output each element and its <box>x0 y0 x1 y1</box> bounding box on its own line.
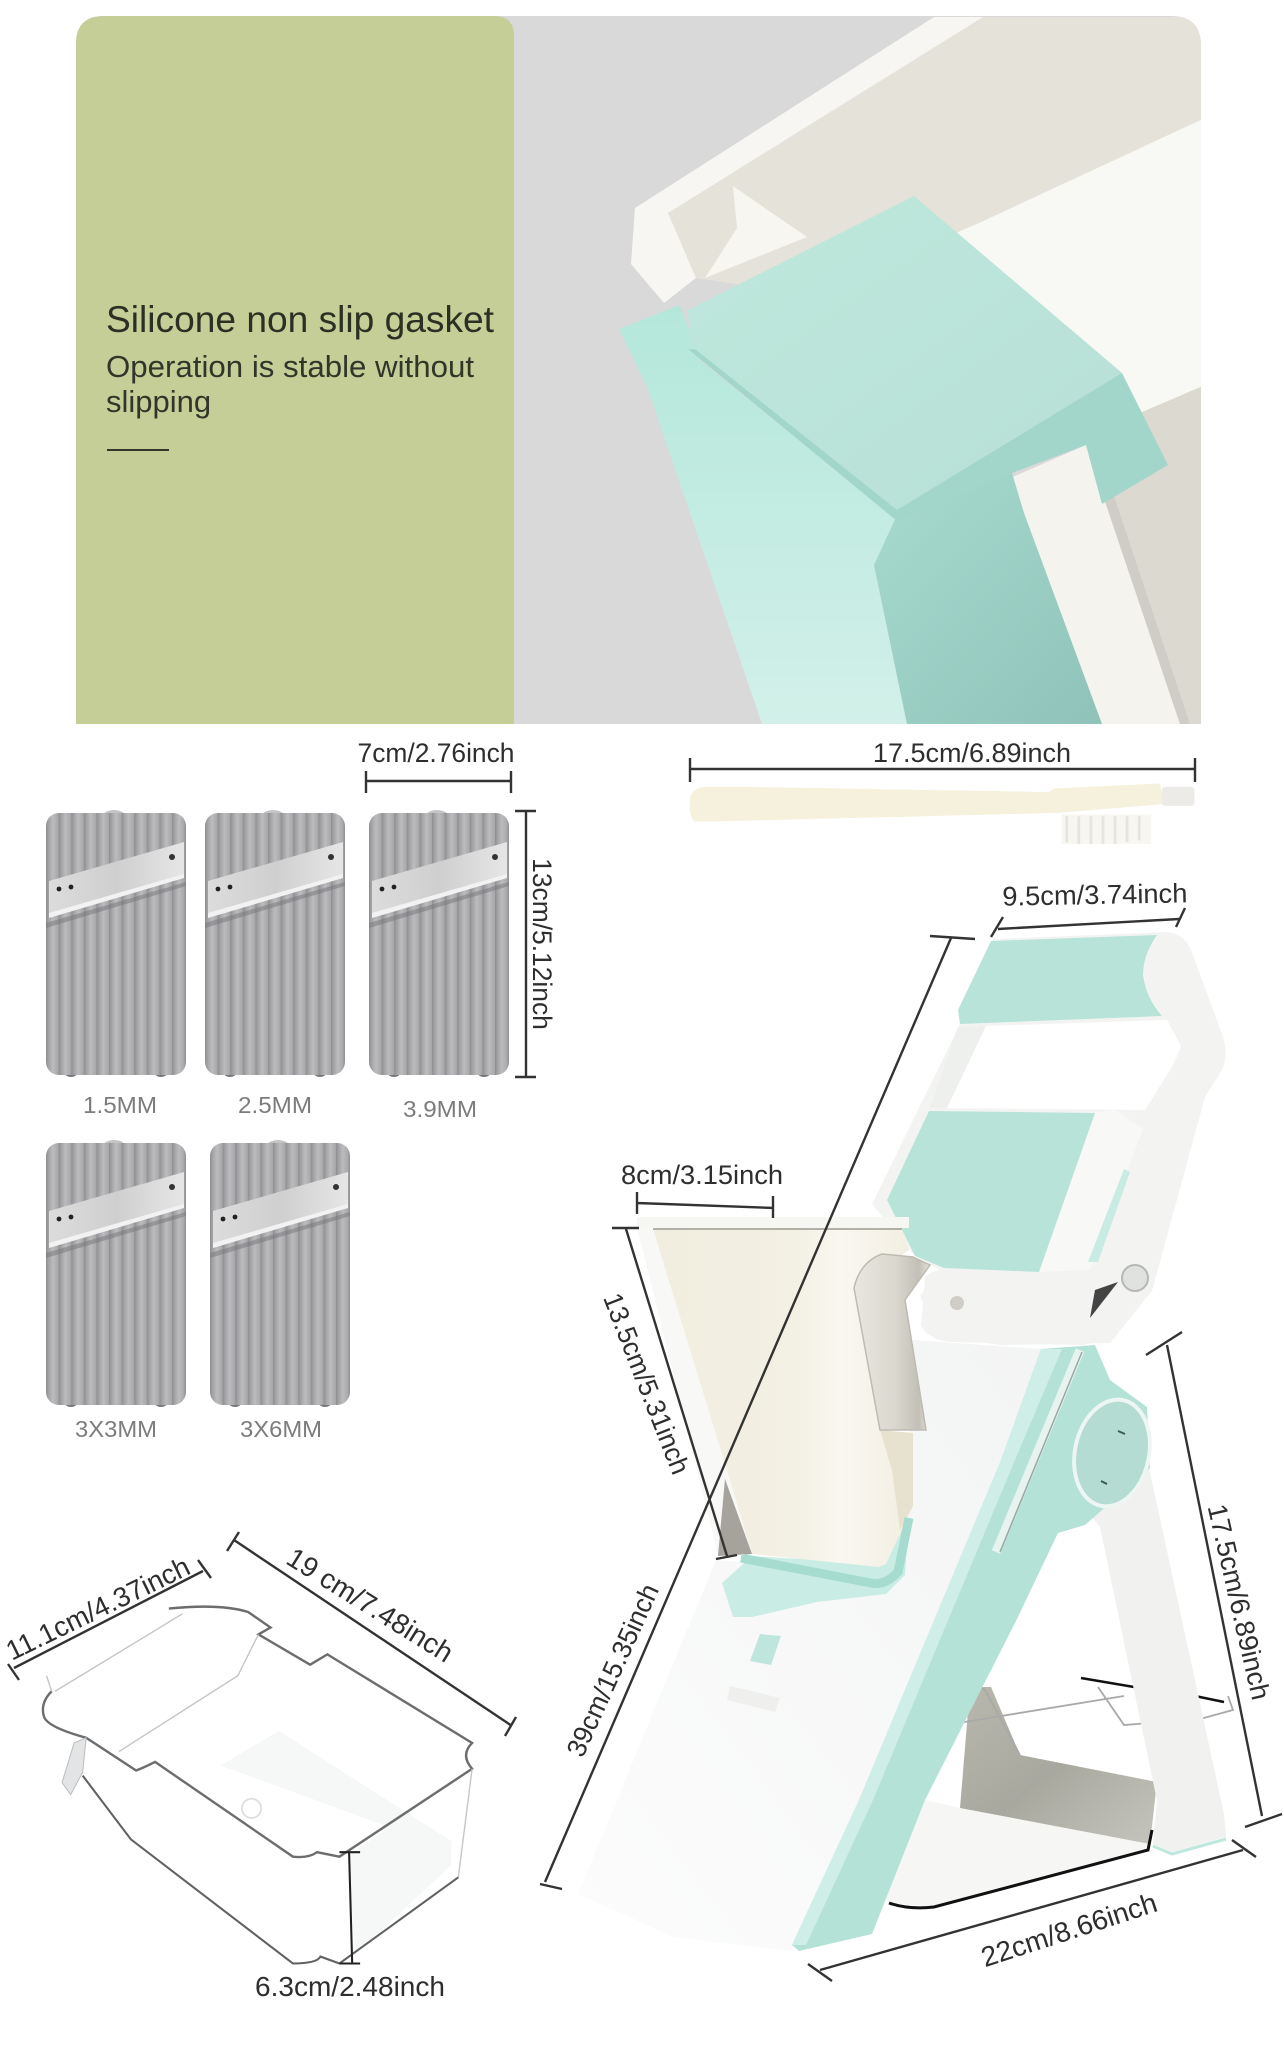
metal blade housing <box>960 1687 1157 1844</box>
dimension: handle width 9.5cm <box>991 878 1188 937</box>
blade 3x3mm <box>46 1140 186 1442</box>
slot groove <box>1000 1352 1082 1552</box>
stripe slot <box>996 1350 1080 1552</box>
slider switch mint <box>750 1634 781 1665</box>
tray outline <box>43 1607 472 1857</box>
gasket pad side <box>688 349 1168 521</box>
blade 2.5mm: 2.5MM <box>238 1092 312 1118</box>
dimension: overall height 39cm: 39cm/15.35inch <box>561 1579 665 1761</box>
dimension: rear leg height 17.5cm <box>1146 1332 1282 1827</box>
blade 2.5mm <box>205 810 345 1118</box>
gasket leg darker side <box>874 473 1102 724</box>
dimension: overall height 39cm <box>540 936 975 1889</box>
gasket leg front face <box>619 305 907 724</box>
tray white inner ledge <box>957 120 1201 412</box>
blade 1.5mm: 1.5MM <box>83 1092 157 1118</box>
hopper seal pale area <box>722 1518 909 1617</box>
hinge disc marks <box>1101 1431 1125 1484</box>
icon: cleaning brush <box>690 783 1194 844</box>
handle frame <box>872 932 1226 1345</box>
black shadow line <box>889 1830 1152 1908</box>
slider switch lower tab <box>727 1686 780 1712</box>
pivot arm hole <box>950 1296 964 1310</box>
rear leg <box>1072 1463 1226 1852</box>
dimension: tray length 19cm: 19 cm/7.48inch <box>281 1541 459 1668</box>
blade 1.5mm <box>46 810 186 1118</box>
hopper cream body <box>653 1229 913 1567</box>
tray height dimension line <box>339 1852 360 1963</box>
dimension: hopper width 8cm: 8cm/3.15inch <box>621 1160 783 1190</box>
blade 3.9mm: 3.9MM <box>403 1096 477 1122</box>
green caption panel <box>76 16 514 724</box>
white strap <box>1008 445 1180 724</box>
pusher mint plate <box>887 1111 1095 1272</box>
handle left strut shade <box>930 1026 986 1108</box>
dimension: hopper height 13.5cm: 13.5cm/5.31inch <box>597 1289 696 1479</box>
short rule under description <box>107 449 169 451</box>
dimension: brush length 17.5cm <box>690 738 1195 782</box>
dimension: tray length 19cm <box>227 1532 516 1736</box>
pivot dark metal <box>1090 1282 1118 1318</box>
hinge disc <box>1065 1392 1159 1514</box>
dimension: rear leg height 17.5cm: 17.5cm/6.89inch <box>1202 1501 1276 1703</box>
illustration: mandoline slicer <box>578 932 1233 1951</box>
tray floor shading <box>221 1731 451 1955</box>
main front body <box>578 1340 1041 1951</box>
rear foot accent <box>1153 1839 1226 1854</box>
stripe lighter edge <box>792 1349 1062 1945</box>
panel: silicone non slip gasket <box>76 16 1205 724</box>
heading: silicone non slip gasket: Silicone non slip gasket <box>106 299 495 340</box>
dimension: blade width 7cm: 7cm/2.76inch <box>358 738 514 768</box>
pivot joint <box>1122 1265 1148 1291</box>
mint side stripe <box>792 1345 1150 1951</box>
dimension: tray width 11.1cm: 11.1cm/4.37inch <box>1 1551 195 1666</box>
small clip detail <box>705 186 807 278</box>
hopper rim <box>637 1217 909 1228</box>
handle mint grip <box>958 935 1162 1024</box>
blade 3x6mm <box>210 1140 350 1442</box>
tray bottom edge <box>83 1776 458 1963</box>
dimension: blade height 13cm: 13cm/5.12inch <box>527 858 557 1030</box>
gasket pad top <box>688 196 1122 510</box>
dimension: hopper width 8cm <box>621 1160 783 1218</box>
tray faint inner edges <box>47 1614 472 1877</box>
pusher side strip <box>1039 1109 1143 1272</box>
pivot arm <box>921 1259 1150 1345</box>
blade 3x6mm: 3X6MM <box>240 1416 322 1442</box>
dimension: brush length 17.5cm: 17.5cm/6.89inch <box>873 738 1071 768</box>
hidden dimension fragments <box>1081 1678 1224 1702</box>
dimension: base depth 22cm <box>808 1840 1256 1981</box>
dimension: handle width 9.5cm: 9.5cm/3.74inch <box>1002 878 1188 912</box>
description text: Operation is stable without <box>106 349 474 384</box>
blade 3.9mm <box>369 810 509 1122</box>
illustration: catch tray <box>43 1607 472 1963</box>
transparent tray behind legs <box>958 1680 1233 1755</box>
photo: gasket close-up <box>76 16 1205 724</box>
blade 3x3mm: 3X3MM <box>75 1416 157 1442</box>
hopper rim line <box>653 1228 902 1230</box>
tray side tab <box>62 1738 86 1795</box>
dimension: base depth 22cm: 22cm/8.66inch <box>977 1887 1161 1973</box>
translucent hinge bracket <box>854 1254 930 1430</box>
base floor <box>872 1800 1150 1907</box>
translucent lower hopper panel <box>880 1430 913 1530</box>
tray inner beige wall <box>668 17 1205 300</box>
tray outer white rim <box>631 17 983 303</box>
panel: five blade inserts <box>46 810 509 1442</box>
dimension: tray height 6.3cm: 6.3cm/2.48inch <box>255 1971 445 2002</box>
dimension: blade height 13cm <box>515 811 557 1077</box>
dimension: hopper height 13.5cm <box>597 1228 737 1559</box>
pusher accent strip <box>1088 1169 1130 1262</box>
dimension: blade width 7cm <box>358 738 514 793</box>
description text second line: slipping <box>106 384 211 419</box>
hopper white left edge <box>637 1227 752 1556</box>
handle opening <box>935 1020 1181 1110</box>
tray drain hole <box>242 1799 261 1818</box>
hopper mint seal <box>741 1518 909 1584</box>
metal blade at hopper bottom <box>718 1479 752 1556</box>
lower tray shadow wall <box>1114 386 1201 724</box>
